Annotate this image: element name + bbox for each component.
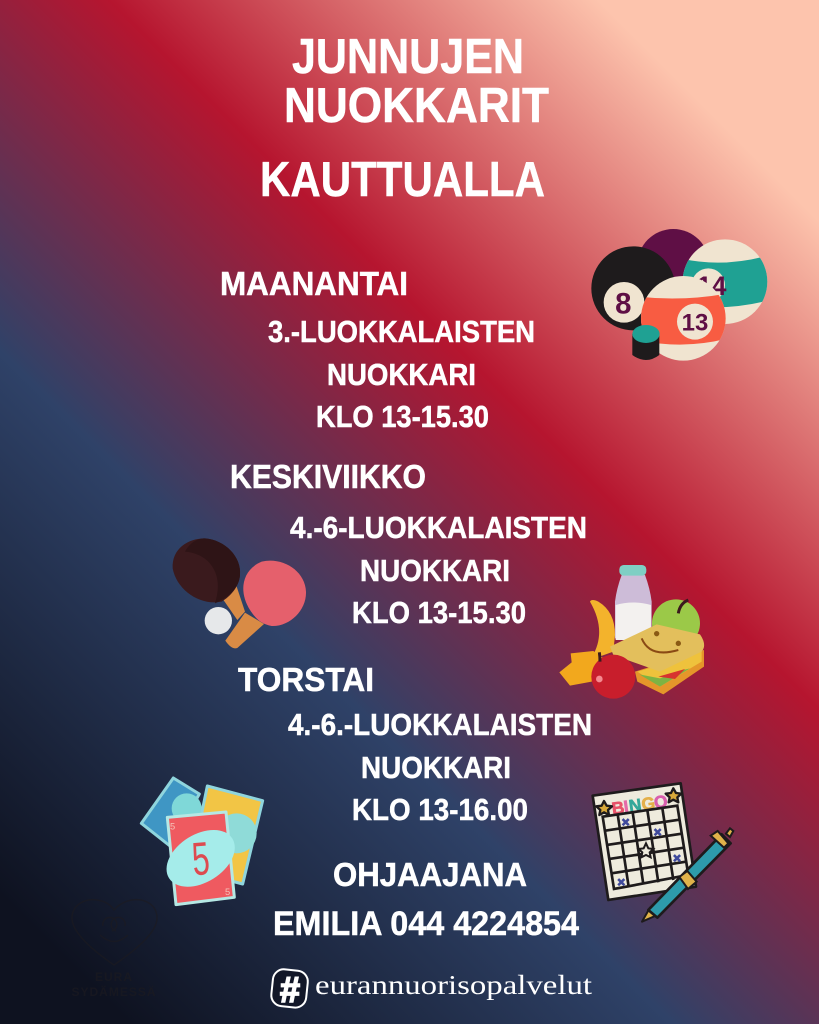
schedule: monday: NUOKKARI [327,357,476,392]
contact: instructor: OHJAAJANA [333,856,527,893]
title: NUOKKARIT [284,79,549,133]
schedule: thursday: TORSTAI [238,661,374,698]
icon: lunch food [559,565,704,699]
icon: table tennis paddles [173,538,306,648]
icon: bingo card and pen: B [610,797,626,819]
logo: Eura sydämessä: EURA [95,970,133,984]
icon: playing cards [141,778,263,905]
icon: bingo card and pen: ✖ [621,816,631,830]
icon: playing cards: 5 [190,832,212,885]
icon: bingo card and pen [593,783,733,922]
icon: playing cards: 5 [225,887,230,897]
icon: bingo card and pen: ✖ [616,876,626,890]
contact: instructor: EMILIA 044 4224854 [273,905,579,943]
schedule: monday [220,265,535,434]
icon: bingo card and pen: ✖ [653,825,663,839]
title [284,30,549,133]
icon: billiard balls: 8 [615,287,631,320]
hashtag badge [270,968,309,1010]
contact: instructor [273,856,579,943]
schedule: wednesday [230,458,587,630]
icon: bingo card and pen: O [653,791,669,813]
schedule: monday: 3.-LUOKKALAISTEN [268,314,535,349]
schedule: wednesday: KLO 13-15.30 [352,595,526,630]
schedule: wednesday: NUOKKARI [360,553,510,588]
schedule: thursday [238,661,592,827]
schedule: wednesday: KESKIVIIKKO [230,458,426,495]
logo: Eura sydämessä [71,900,157,999]
logo: Eura sydämessä: SYDÄMESSÄ [71,984,157,999]
schedule: monday: KLO 13-15.30 [316,399,489,434]
icon: bingo card and pen: N [628,795,643,816]
icon: bingo card and pen: I [622,796,630,817]
subtitle: location: KAUTTUALLA [260,153,545,207]
schedule: thursday: 4.-6.-LUOKKALAISTEN [288,707,592,742]
icon: bingo card and pen: G [640,793,656,814]
hashtag badge: # [280,969,300,1010]
icon: playing cards: 5 [170,821,175,831]
icon: bingo card and pen: ✖ [672,851,682,865]
title: JUNNUJEN [292,30,524,84]
icon: billiard balls [591,229,770,361]
schedule: thursday: KLO 13-16.00 [352,792,528,827]
icon: billiard balls: 13 [682,310,708,337]
schedule: monday: MAANANTAI [220,265,408,302]
schedule: wednesday: 4.-6-LUOKKALAISTEN [290,510,587,545]
hashtag text: eurannuorisopalvelut [315,970,593,1000]
schedule: thursday: NUOKKARI [361,750,511,785]
icon: billiard balls: 14 [697,271,727,301]
